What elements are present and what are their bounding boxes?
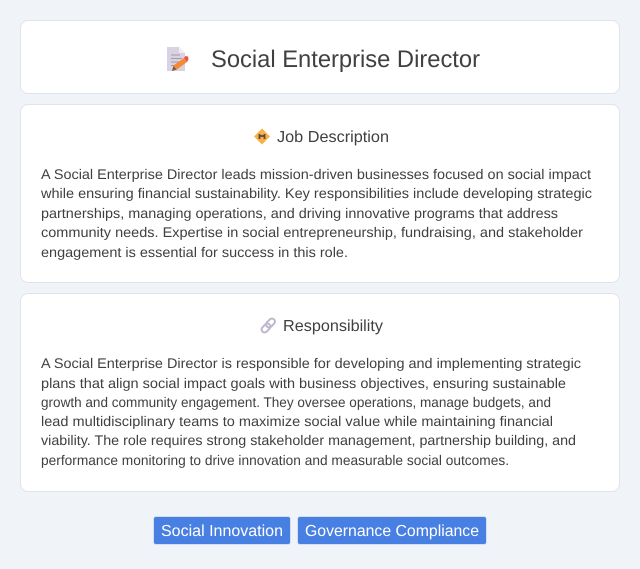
icon: orange diamond	[254, 128, 270, 144]
text block: responsibility: lead multidisciplinary teams to maximize social value while maintaining financial	[41, 413, 553, 429]
panel: title card	[20, 20, 620, 94]
tag: social innovation background	[153, 516, 291, 545]
text block: responsibility: A Social Enterprise Director is responsible for developing and implementing strategic	[41, 355, 581, 371]
text block: responsibility: growth and community engagement. They oversee operations, manage budgets, and	[41, 394, 551, 410]
heading: responsibility: Responsibility	[283, 318, 383, 335]
title: Social Enterprise Director	[211, 46, 480, 73]
text block: responsibility: viability. The role requires strong stakeholder management, partnership building, and	[41, 432, 576, 448]
text block: job description: while ensuring financial sustainability. Key responsibilities include developing strategic	[40, 185, 592, 201]
icon: document with pencil	[167, 47, 188, 71]
text block: job description: partnerships, managing operations, and driving innovative programs that address	[41, 205, 558, 221]
text block: job description: A Social Enterprise Director leads mission-driven businesses focused on social impact	[41, 166, 591, 182]
text block: responsibility: plans that align social impact goals with business objectives, ensuring sustainable	[41, 375, 566, 391]
tag: governance compliance background	[297, 516, 487, 545]
tag label: social innovation: Social Innovation	[161, 523, 283, 540]
text block: responsibility: performance monitoring to drive innovation and measurable social outcomes.	[41, 452, 509, 468]
tag label: governance compliance: Governance Compliance	[305, 523, 479, 540]
text block: job description	[40, 166, 592, 260]
text block: responsibility	[41, 355, 581, 468]
text block: job description: engagement is essential for success in this role.	[41, 244, 348, 260]
icon: chain link	[260, 317, 276, 334]
panel: responsibility card	[20, 293, 620, 492]
heading: job description: Job Description	[277, 129, 389, 146]
text block: job description: community needs. Expertise in social entrepreneurship, fundraising, and stakeholder	[41, 224, 583, 240]
panel: job description card	[20, 104, 620, 283]
